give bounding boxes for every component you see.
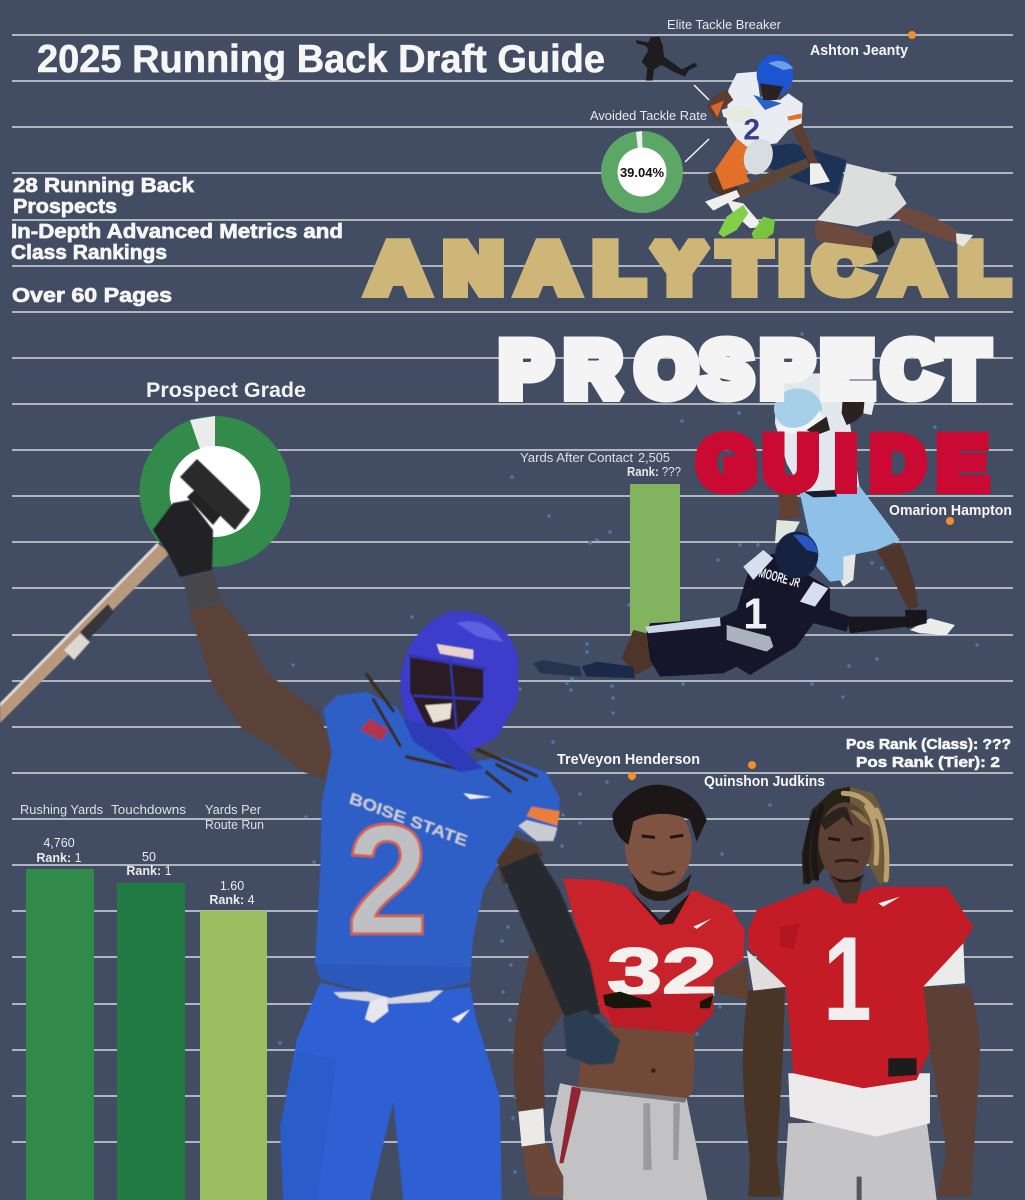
bars: rushing yards, touchdowns, yards per route run: Rank: 1 [126, 864, 172, 878]
player: Ashton Jeanty tackle photo [705, 54, 973, 256]
bars: rushing yards, touchdowns, yards per route run: Rank: 4 [209, 893, 255, 907]
bars: rushing yards, touchdowns, yards per route run: 50 [142, 850, 156, 864]
bar: yards after contact: 2,505 [638, 450, 670, 465]
bar: yards after contact [520, 450, 681, 634]
label: TreVeyon Henderson: TreVeyon Henderson [557, 751, 700, 768]
text block: guide highlights: Prospects [13, 196, 117, 218]
text block: guide highlights [11, 175, 343, 307]
text block: guide highlights: In-Depth Advanced Metrics and [11, 221, 343, 243]
label: Ashton Jeanty: Ashton Jeanty [810, 42, 909, 59]
sledgehammer [0, 459, 250, 723]
player: Ashton Jeanty tackle photo: 2 [743, 113, 760, 146]
position ranks [846, 736, 1011, 771]
glove [563, 1009, 620, 1065]
helmet [400, 611, 518, 753]
dreadlocks [367, 675, 537, 791]
text block: guide highlights: Over 60 Pages [12, 285, 172, 307]
bars: rushing yards, touchdowns, yards per route run: Rushing Yards [20, 802, 103, 817]
bars: rushing yards, touchdowns, yards per route run: Route Run [205, 817, 264, 832]
player: Quinshon Judkins [743, 787, 980, 1200]
position ranks: Pos Rank (Class): ??? [846, 736, 1011, 753]
player: Duke tackler: 1 [743, 590, 767, 638]
pointer lines [685, 85, 709, 162]
icon: stiff-arm silhouette [636, 37, 697, 81]
player: Duke tackler [533, 532, 927, 678]
position ranks: Pos Rank (Tier): 2 [856, 754, 1000, 771]
bars: rushing yards, touchdowns, yards per route run: Yards Per [205, 802, 262, 817]
elite tackle breaker label: Elite Tackle Breaker [667, 17, 782, 32]
bar: yards after contact: Rank: ??? [627, 464, 681, 479]
label: Quinshon Judkins [704, 761, 825, 790]
label: Quinshon Judkins: Quinshon Judkins [704, 773, 825, 790]
player: Omarion Hampton [774, 373, 955, 635]
text block: guide highlights: Class Rankings [11, 242, 167, 264]
avoided tackle rate label: Avoided Tackle Rate [590, 108, 707, 123]
player: Duke tackler: MOORE JR [758, 564, 802, 590]
bars: rushing yards, touchdowns, yards per route run: 4,760 [43, 836, 75, 850]
heading: GUIDE: GUIDE [698, 421, 988, 504]
bars: rushing yards, touchdowns, yards per route run: Rank: 1 [36, 851, 82, 865]
pants [280, 983, 502, 1200]
dreadlocks [802, 787, 890, 885]
bar: yards after contact: Yards After Contact [520, 450, 633, 465]
arm sleeve [500, 853, 600, 1021]
player: Quinshon Judkins: 1 [823, 912, 872, 1046]
label: TreVeyon Henderson [557, 751, 700, 780]
bars: rushing yards, touchdowns, yards per route run [20, 802, 267, 1200]
player: TreVeyon Henderson: 32 [607, 936, 717, 1010]
donut: avoided tackle rate [601, 131, 683, 213]
heading: prospect grade: Prospect Grade [146, 378, 306, 402]
bars: rushing yards, touchdowns, yards per route run: Touchdowns [111, 802, 187, 817]
player: TreVeyon Henderson [513, 785, 748, 1200]
bars: rushing yards, touchdowns, yards per route run: 1.60 [220, 879, 244, 893]
jersey [315, 692, 560, 998]
player: Ashton Jeanty with sledgehammer: 2 [347, 793, 428, 968]
label: Ashton Jeanty [810, 31, 916, 59]
heading: ANALYTICAL: ANALYTICAL [370, 230, 1007, 306]
left arm bicep [497, 837, 543, 885]
player: Ashton Jeanty with sledgehammer [0, 459, 620, 1200]
title: 2025 Running Back Draft Guide [37, 38, 605, 81]
heading: PROSPECT: PROSPECT [500, 328, 988, 412]
label: Omarion Hampton: Omarion Hampton [889, 502, 1012, 519]
donut: avoided tackle rate: 39.04% [620, 165, 664, 180]
player: Ashton Jeanty with sledgehammer: BOISE STATE [347, 790, 469, 851]
text block: guide highlights: 28 Running Back [13, 175, 195, 197]
donut: prospect grade [140, 416, 290, 567]
